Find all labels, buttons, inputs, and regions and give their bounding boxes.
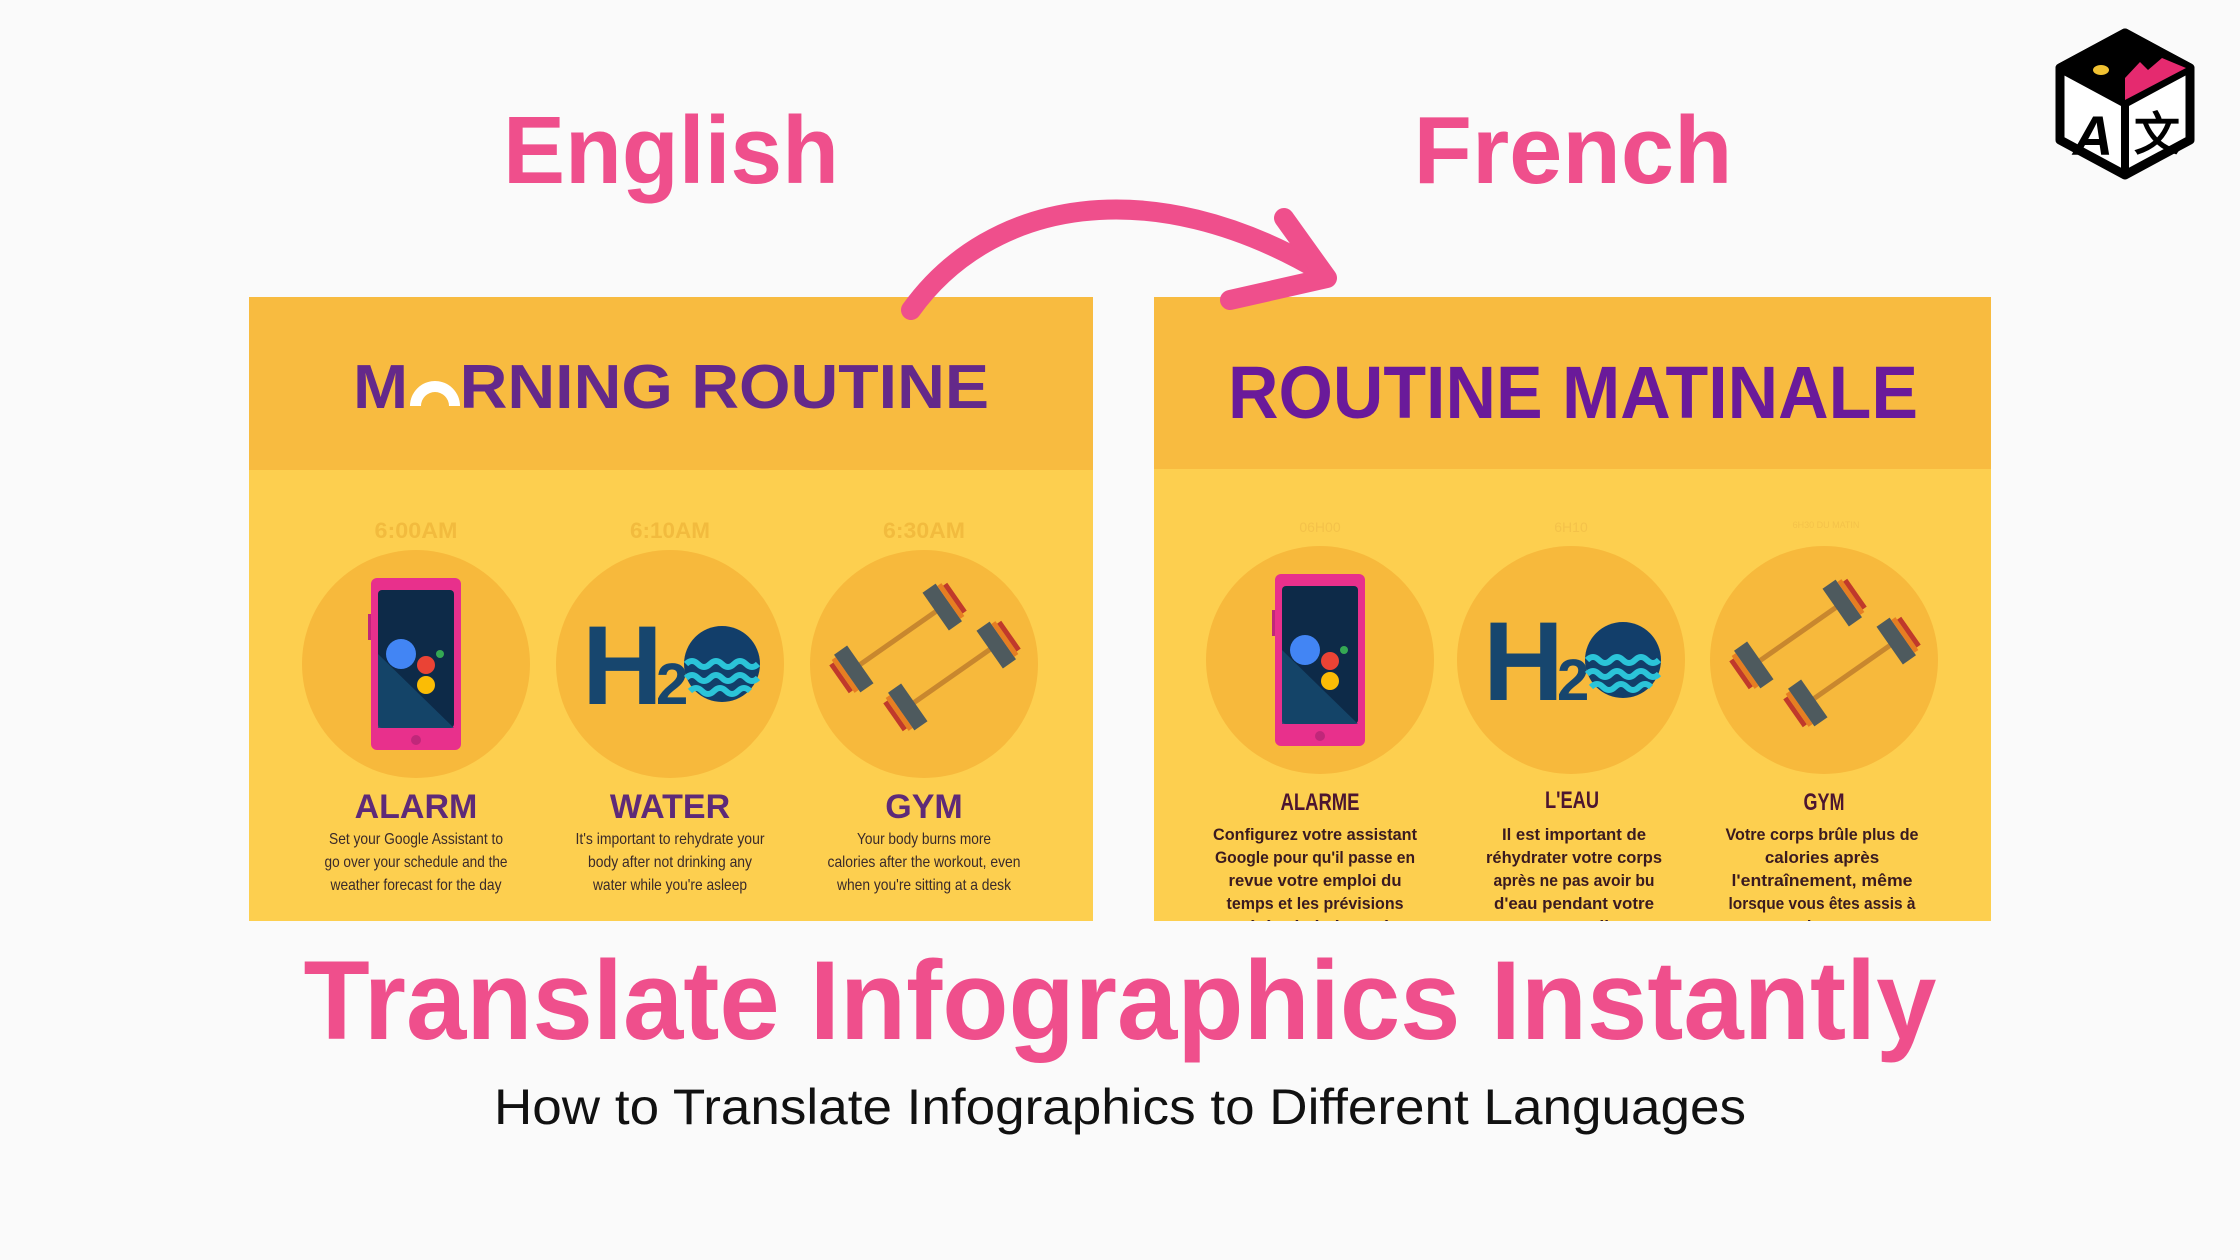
heading: French: French xyxy=(1414,97,1732,204)
icon: translate cube logo: 文 xyxy=(2134,108,2180,160)
panel: French infographic xyxy=(1154,297,1991,936)
arrow: English to French xyxy=(911,209,1327,310)
icon: H2O xyxy=(582,603,760,728)
descriptions xyxy=(324,831,1020,894)
icon: dumbbells xyxy=(826,578,1024,736)
times: 6:00AM xyxy=(374,518,458,543)
descriptions: when you're sitting at a desk xyxy=(836,877,1012,894)
main title: Translate Infographics Instantly xyxy=(304,938,1936,1063)
icon circles xyxy=(1206,546,1434,774)
descriptions: d'eau pendant votre xyxy=(1494,894,1654,913)
labels: ALARME xyxy=(1280,789,1360,816)
descriptions: Set your Google Assistant to xyxy=(329,831,503,848)
descriptions: calories après xyxy=(1765,848,1879,867)
icon: translate cube logo xyxy=(2060,33,2190,175)
descriptions: réhydrater votre corps xyxy=(1486,848,1662,867)
times xyxy=(374,518,965,543)
descriptions: sommeil xyxy=(1539,917,1609,936)
panel title: MORNING ROUTINE: MORNING ROUTINE xyxy=(353,353,989,422)
descriptions: Votre corps brûle plus de xyxy=(1726,825,1918,844)
descriptions: Configurez votre assistant xyxy=(1213,825,1417,844)
descriptions: temps et les prévisions xyxy=(1226,894,1404,913)
descriptions: Your body burns more xyxy=(857,831,991,848)
times: 6H30 DU MATIN xyxy=(1793,520,1859,530)
times: 06H00 xyxy=(1299,519,1341,535)
labels: WATER xyxy=(610,788,730,826)
descriptions: revue votre emploi du xyxy=(1228,871,1402,890)
labels xyxy=(1281,792,1844,810)
descriptions xyxy=(1214,827,1918,921)
descriptions: calories after the workout, even xyxy=(828,854,1020,871)
icon: phone xyxy=(368,578,461,750)
descriptions: un bureau xyxy=(1782,917,1862,936)
labels: L'EAU xyxy=(1545,787,1599,814)
descriptions: l'entraînement, même xyxy=(1732,871,1912,890)
labels: GYM xyxy=(885,788,963,826)
heading: English: English xyxy=(503,97,839,204)
labels: ALARM xyxy=(355,788,477,826)
icon circles xyxy=(302,550,530,778)
times: 6:30AM xyxy=(883,518,965,543)
icon: dumbbells xyxy=(1726,574,1924,732)
subtitle: How to Translate Infographics to Different Languages xyxy=(494,1079,1746,1135)
icon: phone xyxy=(1272,574,1365,746)
panel: English infographic xyxy=(249,297,1093,921)
descriptions: weather forecast for the day xyxy=(330,877,502,894)
descriptions: météo de la journée xyxy=(1230,917,1400,936)
descriptions: water while you're asleep xyxy=(592,877,747,894)
panel title: ROUTINE MATINALE: ROUTINE MATINALE xyxy=(1228,351,1918,434)
times: 6H10 xyxy=(1554,519,1588,535)
descriptions: go over your schedule and the xyxy=(324,854,508,871)
labels xyxy=(355,788,963,826)
descriptions: Il est important de xyxy=(1502,825,1646,844)
descriptions: Google pour qu'il passe en xyxy=(1215,848,1415,867)
descriptions: lorsque vous êtes assis à xyxy=(1728,894,1916,913)
descriptions: body after not drinking any xyxy=(588,854,752,871)
icon: translate cube logo: A xyxy=(2071,104,2113,167)
descriptions: It's important to rehydrate your xyxy=(576,831,765,848)
times: 6:10AM xyxy=(630,518,710,543)
icon: H2O xyxy=(1490,622,1662,700)
descriptions: après ne pas avoir bu xyxy=(1494,871,1654,890)
labels: GYM xyxy=(1804,789,1844,816)
times xyxy=(1300,522,1858,532)
